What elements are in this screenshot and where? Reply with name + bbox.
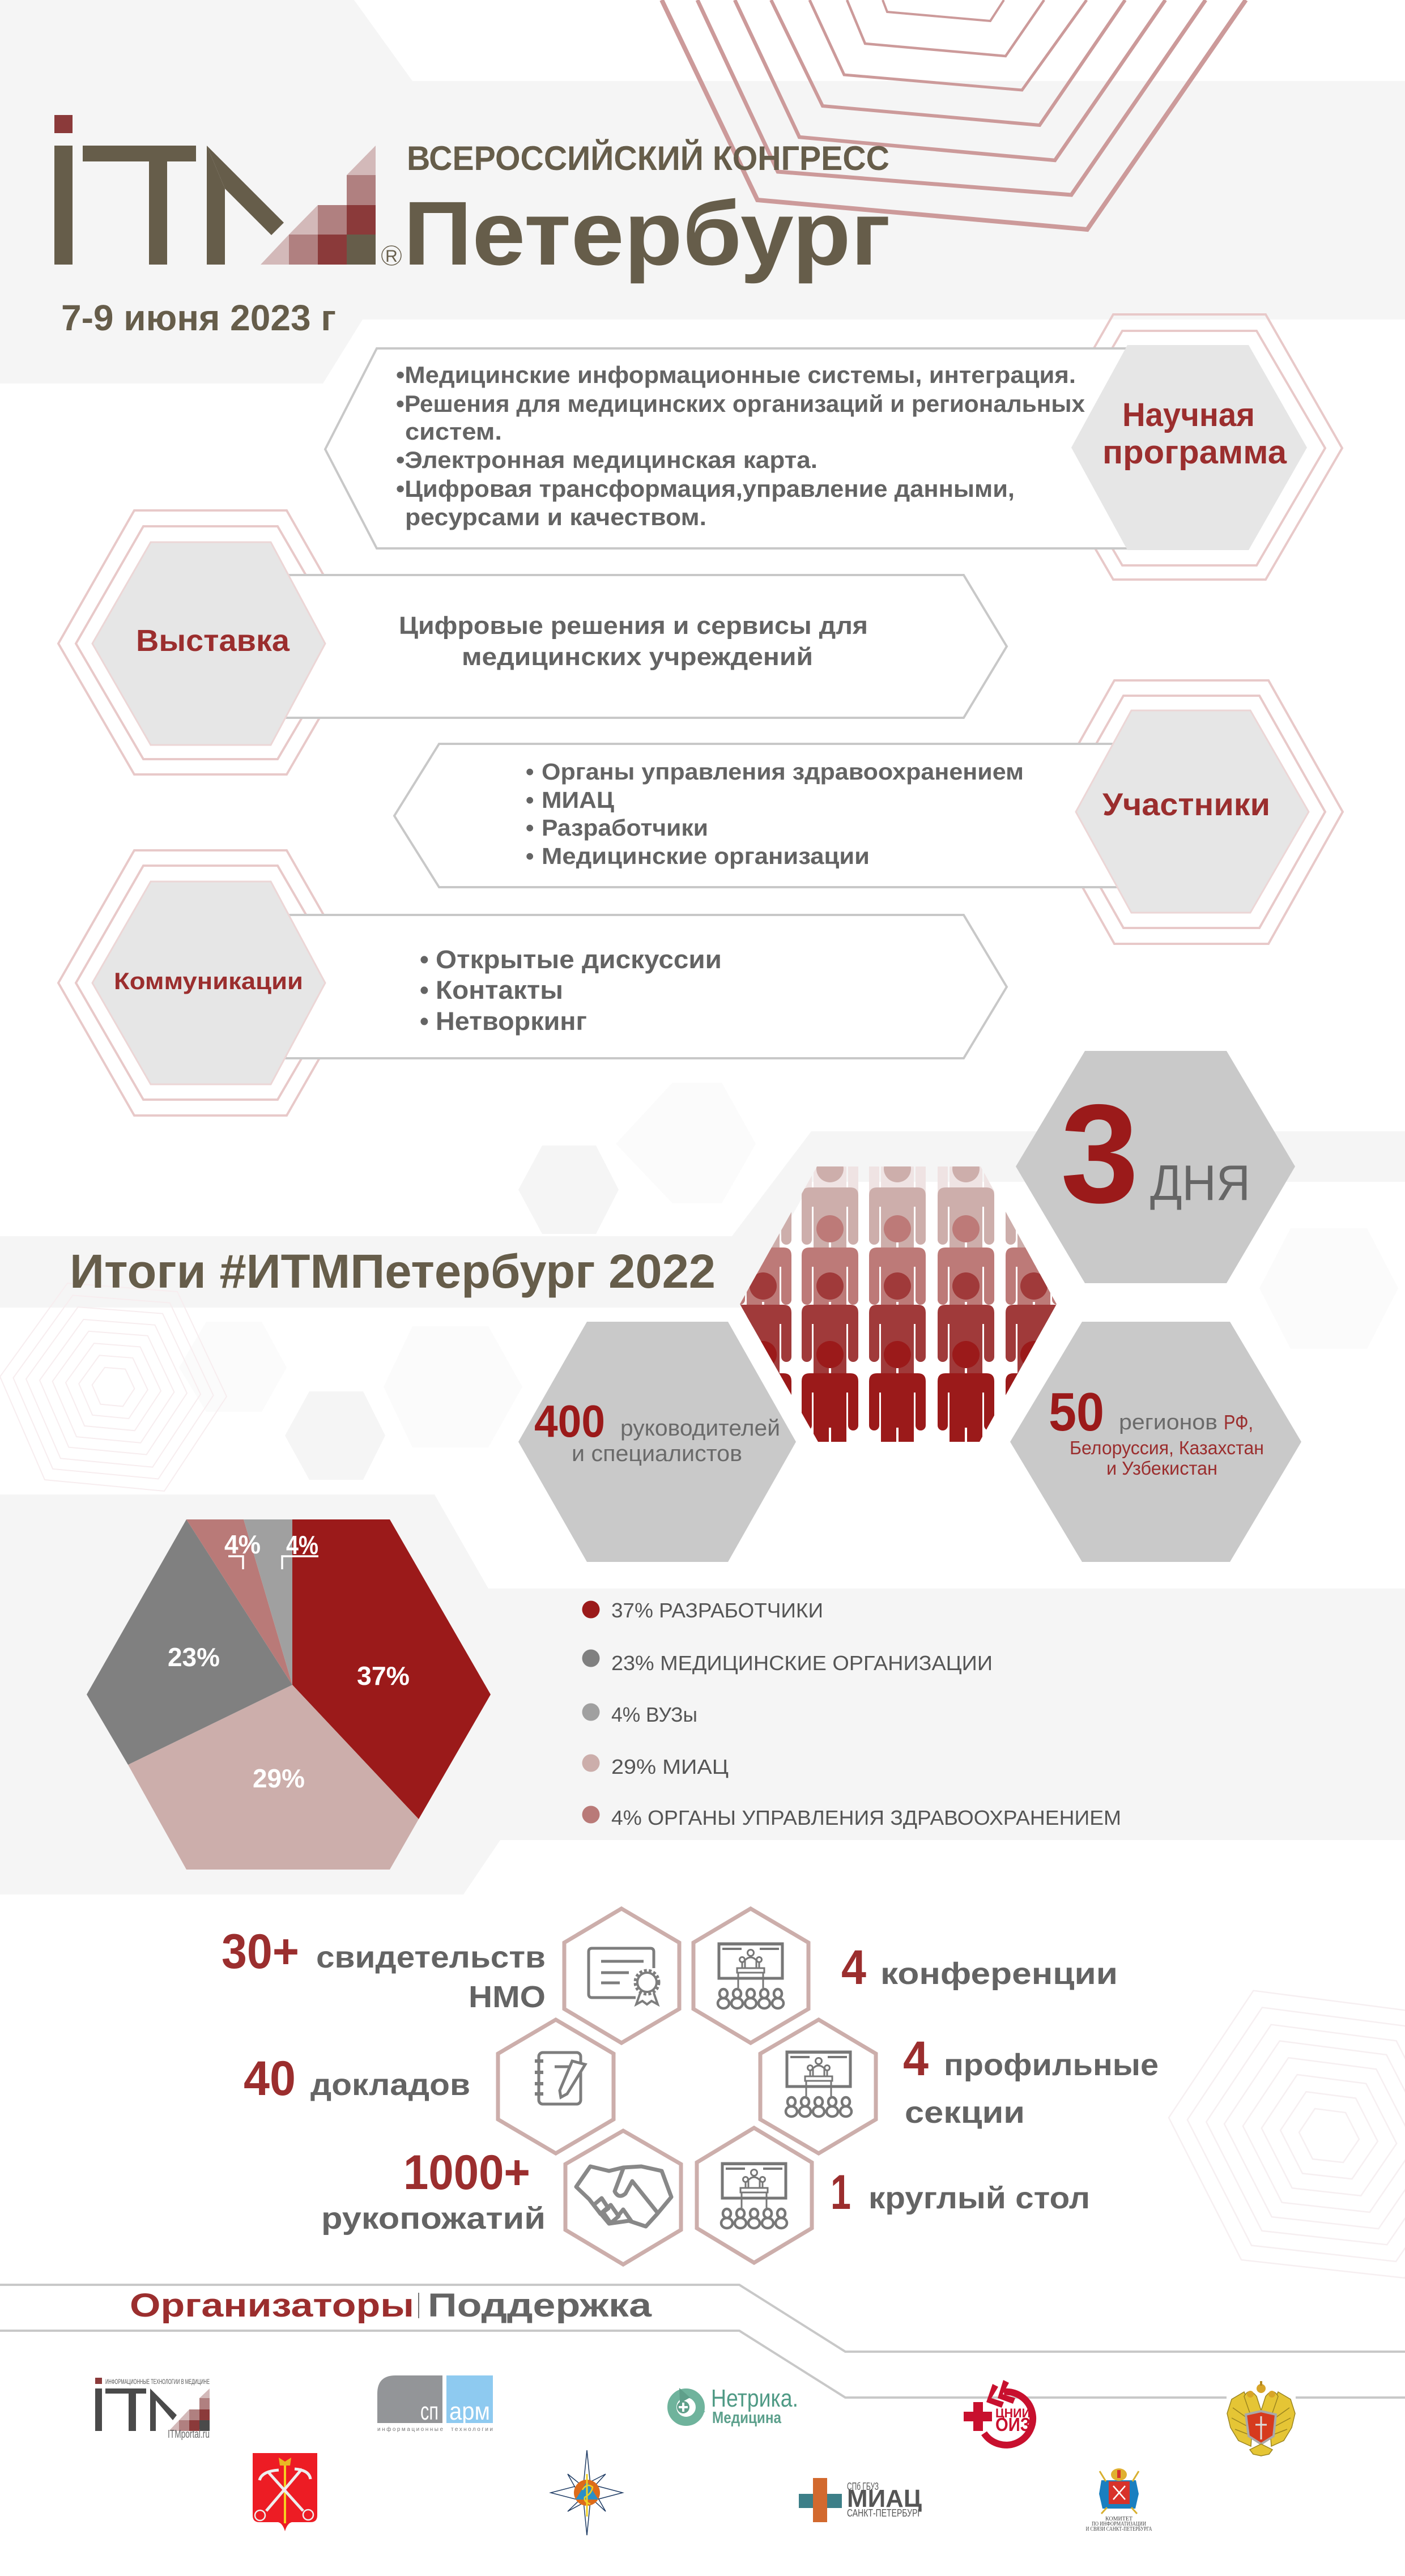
- stat: 30+ certificates: [222, 1909, 679, 2043]
- people hexagon pictogram: [735, 1111, 1062, 1453]
- icon: handshake: [576, 2166, 671, 2226]
- stat: 40 talks: [244, 2020, 614, 2153]
- participants list: Органы управления здравоохранением: [542, 759, 1024, 785]
- stat hexagon: 3 days: 3: [1061, 1075, 1139, 1232]
- logo: Committee emblem: ПО ИНФОРМАТИЗАЦИИ: [1092, 2521, 1146, 2527]
- logo: EMERCOM star: [551, 2450, 623, 2535]
- chart legend: 23% МЕДИЦИНСКИЕ ОРГАНИЗАЦИИ: [611, 1651, 993, 1675]
- communications list: •: [420, 1007, 429, 1036]
- logo: SP ARM: [377, 2375, 493, 2433]
- stat: 30+ certificates: 30+: [222, 1924, 299, 1979]
- stat: 40 talks: 40: [244, 2051, 296, 2106]
- logo: Committee emblem: КОМИТЕТ: [1105, 2516, 1132, 2522]
- logo: Saint Petersburg coat of arms: [253, 2453, 317, 2531]
- hexagonal pie chart: [87, 1519, 491, 1870]
- programme heading: Научная: [1122, 397, 1255, 433]
- programme list: систем.: [405, 418, 502, 445]
- participants list: МИАЦ: [542, 787, 614, 813]
- logo: ITM portal: ИНФОРМАЦИОННЫЕ ТЕХНОЛОГИИ В МЕДИЦИНЕ: [105, 2378, 210, 2386]
- participants list: •: [526, 787, 534, 813]
- stat: 30+ certificates: свидетельств: [316, 1940, 546, 1974]
- stat: 4 profile sections: профильные: [944, 2048, 1159, 2082]
- pie labels: 37%: [357, 1661, 410, 1691]
- participants list: •: [526, 759, 534, 785]
- stat: 40 talks: докладов: [310, 2068, 470, 2102]
- pie labels: [168, 1530, 410, 1793]
- congress title: [403, 139, 891, 284]
- communications list: [420, 945, 722, 1036]
- congress title: ВСЕРОССИЙСКИЙ КОНГРЕСС: [407, 139, 889, 177]
- panel: participants: [394, 680, 1343, 944]
- stat hexagon: 50: регионов: [1119, 1411, 1217, 1434]
- decorative nested hexagons at top: [662, 0, 1246, 229]
- programme list: [396, 361, 1085, 530]
- stat hexagon: 400: руководителей: [620, 1416, 780, 1441]
- stat hexagon: 50: РФ,: [1224, 1411, 1253, 1434]
- participants list: •: [526, 815, 534, 841]
- logo: TsNIIOIZ: [964, 2380, 1033, 2445]
- icon: notebook: [535, 2053, 585, 2104]
- programme heading: программа: [1102, 434, 1287, 471]
- pie labels: 4%: [286, 1530, 318, 1560]
- stat hexagon: 50: 50: [1049, 1382, 1104, 1442]
- logo: MIAC: СПб ГБУЗ: [847, 2481, 879, 2492]
- stat: 4 conferences: 4: [841, 1940, 866, 1995]
- logo: MIAC: САНКТ-ПЕТЕРБУРГ: [847, 2507, 922, 2519]
- exhibition text: [399, 612, 868, 671]
- programme list: •Медицинские информационные системы, интеграция.: [396, 361, 1076, 388]
- programme list: ресурсами и качеством.: [405, 504, 706, 530]
- decorative concentric hexagons left: [0, 1283, 227, 1491]
- stat hexagon: 400: и специалистов: [572, 1441, 742, 1466]
- organisers heading: [130, 2287, 652, 2324]
- programme list: •Решения для медицинских организаций и региональных: [396, 390, 1085, 417]
- communications heading: Коммуникации: [114, 968, 303, 994]
- stat hexagon: 50: Белоруссия, Казахстан: [1070, 1437, 1264, 1458]
- logo: SP ARM: сп: [420, 2398, 438, 2425]
- logo: TsNIIOIZ: ОИЗ: [995, 2414, 1031, 2435]
- organisers heading: Организаторы: [130, 2287, 414, 2324]
- chart legend: 4% ВУЗы: [611, 1703, 697, 1726]
- exhibition heading: Выставка: [136, 624, 290, 658]
- stat: 30+ certificates: НМО: [469, 1980, 546, 2014]
- decorative concentric hexagons right: [1169, 1991, 1405, 2278]
- panel: communications: [58, 850, 1007, 1115]
- icon: conference: [718, 1943, 784, 2008]
- stat: 1 round table: 1: [831, 2165, 851, 2220]
- icon: sections: [786, 2051, 851, 2117]
- stat: 1000+ handshakes: [321, 2131, 681, 2264]
- participants list: [526, 759, 1024, 869]
- logo: Netrika: [672, 2385, 798, 2427]
- logo: SP ARM: информационные: [377, 2426, 443, 2433]
- stat: 4 conferences: конференции: [880, 1957, 1118, 1991]
- organisers heading: Поддержка: [428, 2287, 652, 2324]
- logo: Netrika: Нетрика.: [711, 2385, 798, 2412]
- communications list: Открытые дискуссии: [436, 945, 722, 974]
- exhibition text: медицинских учреждений: [462, 643, 813, 671]
- icon: round table: [721, 2162, 787, 2228]
- congress title: Петербург: [403, 182, 891, 284]
- programme list: •Электронная медицинская карта.: [396, 446, 818, 473]
- logo: Ministry of Health emblem: [1227, 2379, 1296, 2456]
- logo: MIAC: [799, 2478, 922, 2522]
- results band background: [0, 1131, 1405, 1308]
- exhibition text: Цифровые решения и сервисы для: [399, 612, 868, 640]
- stat hexagon: 3 days: [1016, 1051, 1295, 1283]
- logo: Committee emblem: И СВЯЗИ САНКТ-ПЕТЕРБУРГА: [1085, 2526, 1152, 2532]
- pie labels: 29%: [253, 1764, 305, 1793]
- logo: SP ARM: арм: [449, 2398, 490, 2425]
- logo: TsNIIOIZ: ЦНИИ: [995, 2406, 1031, 2420]
- communications list: Нетворкинг: [436, 1007, 587, 1036]
- stat: 1000+ handshakes: 1000+: [403, 2145, 530, 2200]
- organisers band lines: [0, 2285, 1405, 2398]
- stat hexagon: 50: и Узбекистан: [1106, 1458, 1217, 1479]
- stat: 4 profile sections: секции: [905, 2096, 1025, 2130]
- logo: MIAC: МИАЦ: [847, 2485, 922, 2513]
- chart legend: [582, 1599, 1121, 1829]
- header background band: [0, 0, 1405, 384]
- chart legend: 29% МИАЦ: [611, 1755, 729, 1778]
- logo: Netrika: Медицина: [712, 2409, 782, 2427]
- date: 7-9 июня 2023 г: [61, 297, 336, 338]
- stat: 1 round table: [697, 2128, 1090, 2263]
- logo: Committee emblem: [1085, 2468, 1152, 2532]
- stat: 1 round table: круглый стол: [868, 2181, 1090, 2215]
- icon: certificate: [589, 1948, 659, 2004]
- logo: ITM: [54, 115, 401, 266]
- chart section background: [0, 1494, 1405, 1894]
- stat: 1000+ handshakes: рукопожатий: [321, 2202, 546, 2236]
- pie labels: 23%: [168, 1642, 220, 1672]
- panel: exhibition: [58, 510, 1007, 774]
- stat: 4 conferences: [693, 1909, 1118, 2043]
- background light hexagons: [179, 1083, 1398, 1480]
- participants heading: Участники: [1102, 786, 1270, 822]
- participants list: Разработчики: [542, 815, 708, 841]
- communications list: Контакты: [436, 976, 563, 1004]
- pie labels: 4%: [224, 1530, 261, 1559]
- logo: ITM portal: [95, 2378, 210, 2441]
- participants list: •: [526, 843, 534, 869]
- communications list: •: [420, 976, 429, 1004]
- communications list: •: [420, 945, 429, 974]
- stat hexagon: 3 days: ДНЯ: [1150, 1155, 1250, 1211]
- stat hexagon: 400: [518, 1322, 796, 1562]
- chart legend: 4% ОРГАНЫ УПРАВЛЕНИЯ ЗДРАВООХРАНЕНИЕМ: [611, 1806, 1121, 1829]
- stat: 4 profile sections: 4: [903, 2032, 929, 2086]
- stat hexagon: 50: [1010, 1322, 1301, 1562]
- logo: ITM portal: ITMportal.ru: [168, 2428, 210, 2441]
- participants list: Медицинские организации: [542, 843, 870, 869]
- logo: SP ARM: технологии: [451, 2426, 493, 2433]
- stat: 4 profile sections: [760, 2020, 1159, 2153]
- stat hexagon: 400: 400: [534, 1396, 605, 1446]
- programme list: •Цифровая трансформация,управление данными,: [396, 475, 1015, 502]
- logo: ITM: R: [385, 247, 398, 266]
- panel: scientific programme: [325, 314, 1342, 580]
- programme heading: [1102, 397, 1287, 471]
- results heading: Итоги #ИТМПетербург 2022: [70, 1245, 716, 1298]
- chart legend: 37% РАЗРАБОТЧИКИ: [611, 1599, 823, 1622]
